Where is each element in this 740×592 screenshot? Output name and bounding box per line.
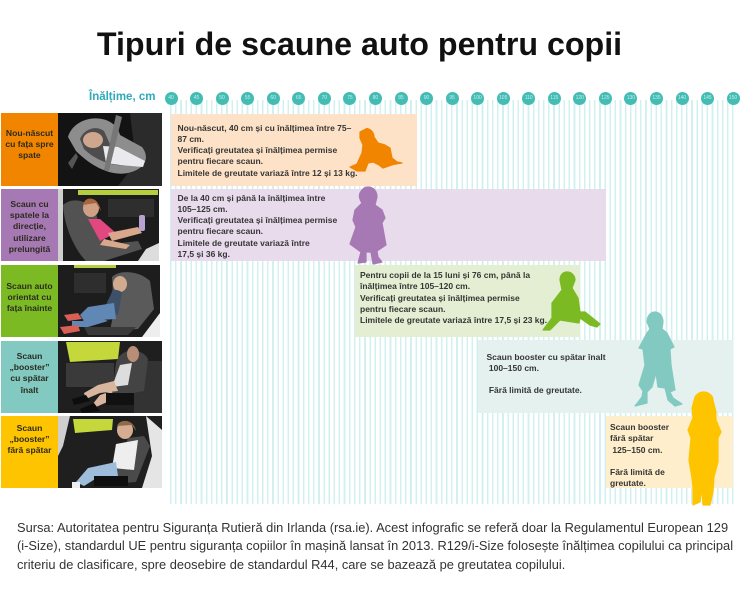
band: newborn <box>171 114 416 186</box>
label: rear-facing newborn <box>1 113 58 186</box>
height axis ticks: 105 <box>499 95 507 101</box>
icon: crawling baby silhouette <box>350 128 402 171</box>
label: forward-facing seat <box>1 265 58 337</box>
height axis ticks: 120 <box>576 95 584 101</box>
label: extended rear-facing: utilizare <box>13 233 46 243</box>
icon: sitting child silhouette <box>543 272 600 330</box>
height axis label: Înălțime, cm <box>89 91 155 103</box>
height axis ticks: 115 <box>550 95 558 101</box>
label: rear-facing newborn: spate <box>18 150 41 160</box>
label: extended rear-facing: prelungită <box>9 244 50 254</box>
height grid stripes <box>170 100 735 504</box>
label: forward-facing seat: Scaun auto <box>6 281 53 291</box>
band: extended rear-facing: De la 40 cm și până la înălțimea între 105–125 cm. Verificați greutatea și înălțimea permise pentru fiecare scaun. Limitele de greutate variază între 17,5 și 36 kg. <box>178 192 337 259</box>
height axis ticks: 45 <box>194 95 199 101</box>
photo: extended rear-facing seat <box>58 189 159 261</box>
label: high-back booster: Scaun <box>17 351 42 361</box>
icon: standing boy silhouette <box>635 312 682 406</box>
source note: criteriu de clasificare, spre deosebire de standardul R44, care se bazează pe greutatea copilului. <box>17 557 565 572</box>
height axis ticks: 130 <box>627 95 635 101</box>
label: extended rear-facing: direcție, <box>13 221 46 231</box>
label: forward-facing seat: orientat cu <box>8 292 51 302</box>
height axis ticks <box>165 92 740 105</box>
label: rear-facing newborn: cu fața spre <box>5 139 54 149</box>
label: backless booster <box>1 416 58 488</box>
label: high-back booster <box>1 341 58 413</box>
label: backless booster: „booster” <box>9 434 50 444</box>
band: high-back booster <box>478 340 733 413</box>
label: extended rear-facing <box>1 189 58 261</box>
label: backless booster: Scaun <box>17 423 42 433</box>
band: extended rear-facing <box>171 189 606 261</box>
label: backless booster: fără spătar <box>8 445 51 455</box>
height axis ticks: 65 <box>296 95 302 101</box>
label: extended rear-facing: Scaun cu <box>10 199 49 209</box>
height axis ticks: 110 <box>525 95 533 101</box>
height axis ticks: 50 <box>219 95 225 101</box>
height axis ticks: 85 <box>398 95 404 101</box>
height axis ticks: 150 <box>729 95 737 101</box>
label: high-back booster: cu spătar <box>10 373 49 383</box>
height axis ticks: 140 <box>678 95 686 101</box>
label: high-back booster: înalt <box>21 385 38 395</box>
band: newborn: Nou-născut, 40 cm și cu înălțimea între 75– 87 cm. Verificați greutatea și înălțimea permise pentru fiecare scaun. Limitele de greutate variază între 12 și 13 kg. <box>178 122 358 178</box>
icon: toddler girl silhouette <box>350 187 386 264</box>
label: forward-facing seat: fața înainte <box>7 303 52 313</box>
title: Tipuri de scaune auto pentru copii <box>97 26 622 62</box>
band: forward-facing <box>355 265 580 337</box>
height axis ticks: 95 <box>449 95 455 101</box>
height axis ticks: 60 <box>270 95 276 101</box>
photo: high-back booster <box>58 341 162 413</box>
photo: backless booster <box>58 416 162 488</box>
band: high-back booster: Scaun booster cu spătar înalt 100–150 cm. Fără limită de greutate. <box>486 352 606 395</box>
band: backless booster <box>606 416 733 488</box>
height axis ticks: 70 <box>322 95 327 101</box>
height axis ticks: 75 <box>347 95 353 101</box>
band: backless booster: Scaun booster fără spătar 125–150 cm. Fără limită de greutate. <box>610 422 669 488</box>
height axis ticks: 90 <box>424 95 429 101</box>
source note <box>17 520 733 572</box>
height axis ticks: 145 <box>703 95 712 101</box>
photo: forward-facing seat <box>58 265 160 337</box>
height axis ticks: 135 <box>652 95 661 101</box>
label: extended rear-facing: spatele la <box>10 210 49 220</box>
label: high-back booster: „booster” <box>9 362 50 372</box>
source note: Sursa: Autoritatea pentru Siguranța Rutieră din Irlanda (rsa.ie). Acest infografic se referă doar la Regulamentul European 129 <box>17 520 728 535</box>
photo: newborn seat <box>58 113 162 186</box>
band: forward-facing: Pentru copii de la 15 luni și 76 cm, până la înălțimea între 105–120 cm. Verificați greutatea și înălțimea permise pentru fiecare scaun. Limitele de greutate variază între 17,5 și 23 kg. <box>360 270 547 325</box>
height axis ticks: 80 <box>373 95 378 101</box>
icon: standing girl silhouette <box>688 392 721 505</box>
height axis ticks: 55 <box>245 95 250 101</box>
label: rear-facing newborn: Nou-născut <box>6 128 53 138</box>
height axis ticks: 125 <box>601 95 610 101</box>
source note: (i-Size), standardul UE pentru siguranța copiilor în mașină lansat în 2013. R129/i-Size folosește înălțimea copilului ca principal <box>17 538 733 553</box>
height axis ticks: 40 <box>168 95 174 101</box>
height axis ticks: 100 <box>473 95 482 101</box>
